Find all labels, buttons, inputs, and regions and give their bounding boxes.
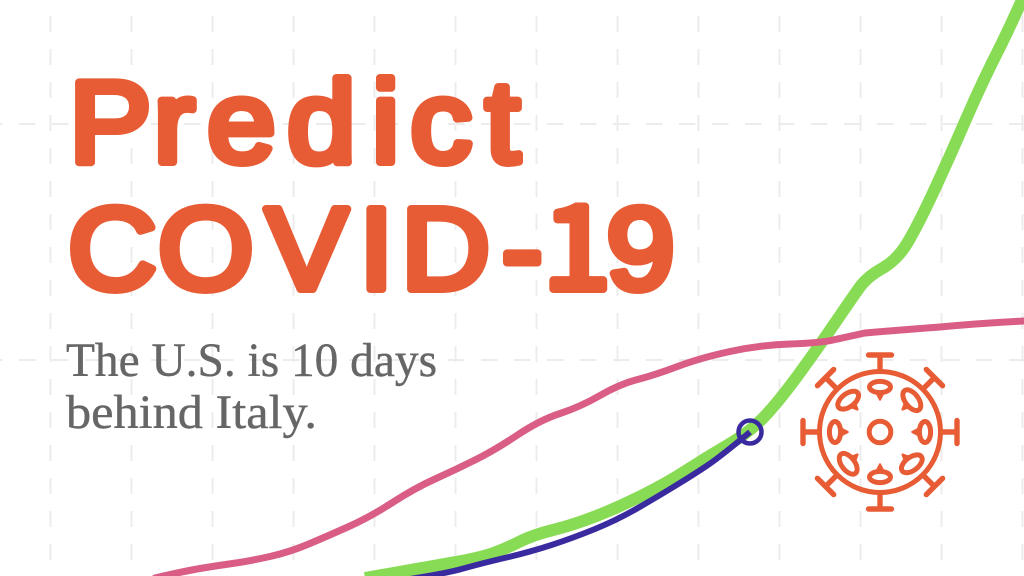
title: COVID-19 xyxy=(68,155,675,323)
line: green Italy curve xyxy=(365,0,1024,576)
line: blue U.S. curve xyxy=(370,432,750,576)
marker: current U.S. position xyxy=(738,420,762,444)
subtitle: behind Italy. xyxy=(66,386,317,439)
title xyxy=(68,58,675,323)
subtitle xyxy=(66,334,437,439)
subtitle: The U.S. is 10 days xyxy=(66,334,437,387)
line: pink reference curve xyxy=(155,321,1024,576)
icon: coronavirus xyxy=(803,355,957,509)
title: Predict xyxy=(69,58,520,187)
